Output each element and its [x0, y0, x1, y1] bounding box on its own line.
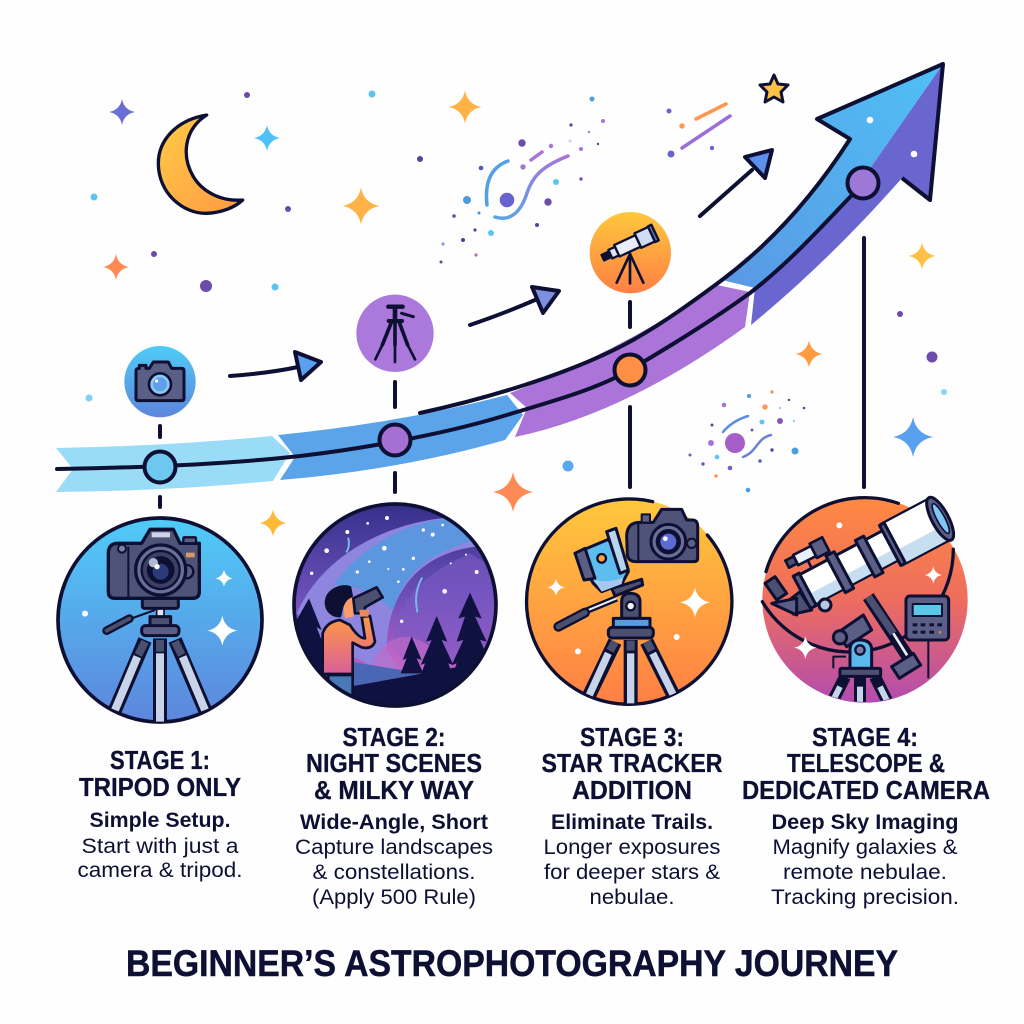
icon: crescent moon	[158, 115, 243, 213]
tripod legs	[115, 638, 205, 723]
galaxy swirl upper	[440, 96, 605, 264]
scattered dots	[86, 90, 947, 472]
DSLR camera	[108, 529, 199, 598]
text block: stage 2: & constellations.	[312, 860, 476, 884]
tripod	[589, 640, 673, 703]
text block: stage 3: for deeper stars &	[544, 860, 720, 884]
text block: stage 4: DEDICATED CAMERA	[742, 775, 990, 805]
text block: stage 4: STAGE 4:	[812, 722, 918, 752]
icon: telescope badge	[590, 212, 671, 293]
text block: stage 4: remote nebulae.	[783, 860, 947, 884]
icon: tripod badge	[356, 295, 434, 372]
telescope tube	[791, 494, 959, 614]
panel: stage 3 illustration	[527, 499, 733, 704]
text block: stage 3: STAGE 3:	[580, 722, 684, 752]
arrow 1	[230, 352, 321, 380]
icon: camera badge	[124, 346, 196, 417]
outline arcs	[527, 499, 732, 704]
centre timeline	[57, 195, 852, 469]
outline arcs	[762, 498, 953, 652]
ribbon segment 3 purple	[510, 285, 750, 437]
text block: stage 4: TELESCOPE &	[787, 748, 945, 778]
arrow 2	[470, 287, 559, 325]
text block: stage 1: Simple Setup.	[90, 809, 230, 832]
text block: stage 1: Start with just a	[82, 834, 239, 858]
growth ribbon arrow	[56, 64, 943, 492]
text block: stage 2: Wide-Angle, Short	[300, 811, 488, 834]
tripod	[832, 677, 888, 703]
text block: stage 2: (Apply 500 Rule)	[312, 885, 476, 909]
stars	[310, 516, 479, 623]
connectors	[160, 238, 864, 507]
text block: stage 4: Deep Sky Imaging	[772, 811, 958, 834]
panel: stage 4 illustration	[762, 494, 968, 703]
shooting streaks	[666, 104, 730, 158]
text block: stage 1: STAGE 1:	[110, 745, 210, 775]
ground	[354, 662, 421, 686]
title: BEGINNER’S ASTROPHOTOGRAPHY JOURNEY	[126, 943, 898, 984]
sparkles	[103, 90, 936, 536]
text block: stage 2: Capture landscapes	[295, 835, 493, 859]
panel: stage 2 illustration	[293, 503, 497, 710]
text block: stage 1: TRIPOD ONLY	[79, 772, 241, 802]
text block: stage 3	[542, 722, 723, 909]
decorative sky: stars and dots	[86, 75, 947, 536]
person	[323, 586, 383, 697]
timeline nodes	[144, 168, 878, 482]
text block: stage 3: Longer exposures	[544, 835, 720, 859]
milky way bands	[297, 517, 477, 683]
progress arrows	[230, 150, 772, 380]
camera	[627, 509, 698, 562]
ribbon segment 1 light blue	[56, 436, 290, 492]
sparkles	[547, 579, 710, 654]
text block: stage 2: NIGHT SCENES	[306, 748, 482, 778]
arrow 3	[700, 150, 772, 216]
equatorial mount	[833, 597, 921, 678]
text block: stage 1	[78, 745, 242, 882]
pine trees	[297, 592, 487, 677]
ribbon segment 2 blue	[278, 395, 523, 480]
text block: stage 4: Tracking precision.	[771, 885, 959, 909]
sparkles	[82, 570, 237, 646]
star tracker	[575, 528, 628, 592]
text block: stage 2	[295, 722, 493, 909]
text block: stage 2: STAGE 2:	[342, 722, 446, 752]
tripod head and handle	[558, 579, 653, 638]
text block: stage 4: Magnify galaxies &	[772, 835, 958, 859]
ribbon segment 4 arrow head	[722, 64, 943, 325]
focuser and diagonal	[765, 577, 831, 615]
hand controller	[906, 596, 949, 678]
text block: stage 4	[742, 722, 990, 909]
text block: stage 3: Eliminate Trails.	[551, 811, 713, 834]
icon: outlined star	[760, 75, 788, 102]
text block: stage 3: STAR TRACKER	[542, 748, 723, 778]
tripod head	[107, 598, 179, 636]
text block: stage 3: nebulae.	[590, 885, 674, 909]
panel: stage 1 illustration	[58, 518, 262, 723]
sparkles	[794, 522, 942, 659]
galaxy swirl lower	[688, 390, 805, 492]
finder scope	[784, 537, 832, 576]
text block: stage 1: camera & tripod.	[78, 858, 242, 882]
text block: stage 2: & MILKY WAY	[314, 775, 474, 805]
upper outline	[420, 280, 722, 413]
text block: stage 3: ADDITION	[572, 775, 692, 805]
